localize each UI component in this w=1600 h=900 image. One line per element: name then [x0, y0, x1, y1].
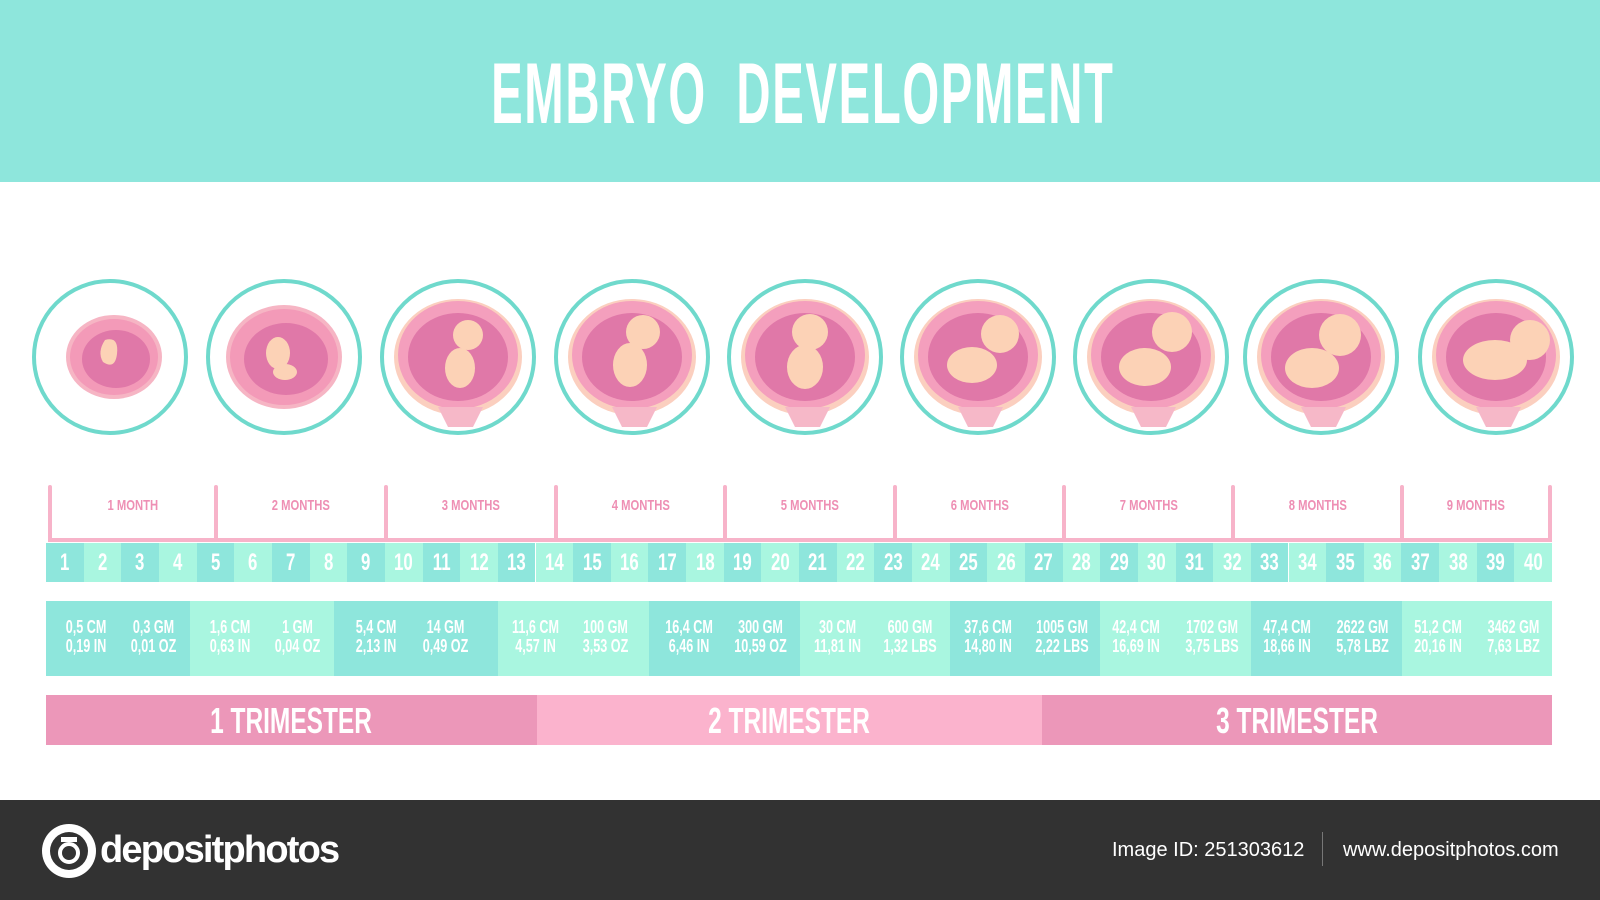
size and weight data row: 37,6 CM: [964, 617, 1012, 637]
week number row: 31: [1185, 549, 1204, 576]
week number row: 37: [1411, 549, 1430, 576]
month labels: 9 MONTHS: [1447, 497, 1505, 514]
circle 9: [1420, 281, 1572, 433]
size and weight data row: 2622 GM: [1337, 617, 1388, 637]
logo: [42, 824, 339, 878]
week number row: 7: [286, 549, 295, 576]
size and weight data row: 5,78 LBZ: [1336, 636, 1389, 656]
size and weight data row: 16,69 IN: [1112, 636, 1160, 656]
size and weight data row: 0,3 GM: [133, 617, 175, 637]
week number row: 40: [1524, 549, 1543, 576]
size and weight data row: 3,75 LBS: [1185, 636, 1239, 656]
week number row: 35: [1336, 549, 1354, 576]
size and weight data row: 3,53 OZ: [583, 636, 629, 656]
month labels: 2 MONTHS: [272, 497, 330, 514]
size and weight data row: 5,4 CM: [356, 617, 396, 637]
size and weight data row: 0,19 IN: [66, 636, 106, 656]
week number row: 29: [1110, 549, 1128, 576]
circle 7: [1075, 281, 1227, 433]
2 trimester: 2 TRIMESTER: [709, 700, 870, 741]
size and weight data row: 100 GM: [584, 617, 628, 637]
week number row: 10: [394, 549, 413, 576]
week number row: 33: [1260, 549, 1279, 576]
size and weight data row: 42,4 CM: [1112, 617, 1160, 637]
week number row: 39: [1486, 549, 1505, 576]
week number row: 20: [771, 549, 790, 576]
size and weight data row: 0,5 CM: [66, 617, 106, 637]
size and weight data row: 51,2 CM: [1414, 617, 1462, 637]
week number row: 28: [1072, 549, 1091, 576]
size and weight data row: 14 GM: [427, 617, 465, 637]
week number row: 25: [959, 549, 978, 576]
header band: [0, 0, 1600, 182]
size and weight data row: 1 GM: [283, 617, 313, 637]
month labels: 5 MONTHS: [781, 497, 839, 514]
week number row: 11: [432, 549, 450, 576]
week number row: 2: [98, 549, 107, 576]
month bracket: [48, 485, 1552, 542]
size and weight data row: 16,4 CM: [665, 617, 713, 637]
size and weight data row: 0,49 OZ: [423, 636, 469, 656]
month labels: 3 MONTHS: [442, 497, 500, 514]
week number row: 1: [60, 549, 69, 576]
size and weight data row: 18,66 IN: [1263, 636, 1311, 656]
circle 6: [902, 281, 1054, 433]
week number row: 22: [846, 549, 865, 576]
week number row: 26: [997, 549, 1015, 576]
size and weight data row: [46, 601, 1552, 676]
circle 1: [34, 281, 186, 433]
1 trimester: [46, 695, 537, 745]
size and weight data row: 4,57 IN: [516, 636, 556, 656]
week number row: 3: [135, 549, 145, 576]
month labels: 8 MONTHS: [1288, 497, 1347, 514]
week number row: [46, 543, 1552, 582]
week number row: 18: [696, 549, 714, 576]
month labels: [108, 497, 1505, 514]
size and weight data row: 11,81 IN: [815, 636, 861, 656]
circle 3: [382, 281, 534, 433]
week number row: 15: [583, 549, 601, 576]
week number row: 8: [324, 549, 333, 576]
size and weight data row: 1,32 LBS: [883, 636, 937, 656]
week number row: 12: [470, 549, 488, 576]
size and weight data row: 2,22 LBS: [1035, 636, 1089, 656]
size and weight data row: 1702 GM: [1186, 617, 1238, 637]
month labels: 4 MONTHS: [611, 497, 670, 514]
3 trimester: 3 TRIMESTER: [1216, 700, 1378, 741]
size and weight data row: 20,16 IN: [1414, 636, 1462, 656]
size and weight data row: 47,4 CM: [1263, 617, 1311, 637]
week number row: 13: [507, 549, 526, 576]
week number row: 6: [248, 549, 258, 576]
title: EMBRYO DEVELOPMENT: [491, 46, 1115, 142]
week number row: 9: [361, 549, 371, 576]
embryo circles: [32, 279, 1574, 435]
2 trimester: [537, 695, 1042, 745]
size and weight data row: 0,63 IN: [210, 636, 250, 656]
week number row: 38: [1449, 549, 1467, 576]
size and weight data row: 3462 GM: [1488, 617, 1539, 637]
week number row: 14: [545, 549, 564, 576]
week number row: 16: [620, 549, 639, 576]
logo: depositphotos: [100, 829, 338, 871]
circle 5: [729, 281, 881, 433]
size and weight data row: 2,13 IN: [356, 636, 396, 656]
1 trimester: 1 TRIMESTER: [211, 700, 372, 741]
size and weight data row: 300 GM: [738, 617, 783, 637]
size and weight data row: 10,59 OZ: [734, 636, 787, 656]
size and weight data row: 600 GM: [888, 617, 932, 637]
week number row: 23: [884, 549, 902, 576]
size and weight data row: 1005 GM: [1036, 617, 1088, 637]
size and weight data row: 6,46 IN: [669, 636, 709, 656]
trimester bar: [46, 695, 1552, 745]
circle 8: [1245, 281, 1397, 433]
week number row: 4: [173, 549, 182, 576]
week number row: 19: [733, 549, 752, 576]
url: www.depositphotos.com: [1343, 839, 1559, 861]
week number row: 30: [1147, 549, 1166, 576]
footer: [0, 800, 1600, 900]
week number row: 21: [808, 549, 827, 576]
month labels: 7 MONTHS: [1119, 497, 1178, 514]
size and weight data row: 7,63 LBZ: [1487, 636, 1540, 656]
size and weight data row: 1,6 CM: [210, 617, 250, 637]
week number row: 27: [1034, 549, 1053, 576]
month labels: 1 MONTH: [108, 497, 158, 514]
size and weight data row: 0,04 OZ: [275, 636, 321, 656]
week number row: 17: [658, 549, 677, 576]
circle 4: [556, 281, 708, 433]
size and weight data row: 0,01 OZ: [131, 636, 177, 656]
month labels: 6 MONTHS: [950, 497, 1009, 514]
image id: Image ID: 251303612: [1112, 839, 1304, 861]
circle 2: [208, 281, 360, 433]
size and weight data row: 30 CM: [819, 617, 857, 637]
week number row: 24: [921, 549, 940, 576]
week number row: 5: [211, 549, 220, 576]
week number row: 34: [1298, 549, 1317, 576]
week number row: 36: [1373, 549, 1392, 576]
3 trimester: [1042, 695, 1552, 745]
size and weight data row: 14,80 IN: [964, 636, 1012, 656]
size and weight data row: 11,6 CM: [513, 617, 559, 637]
week number row: 32: [1223, 549, 1241, 576]
